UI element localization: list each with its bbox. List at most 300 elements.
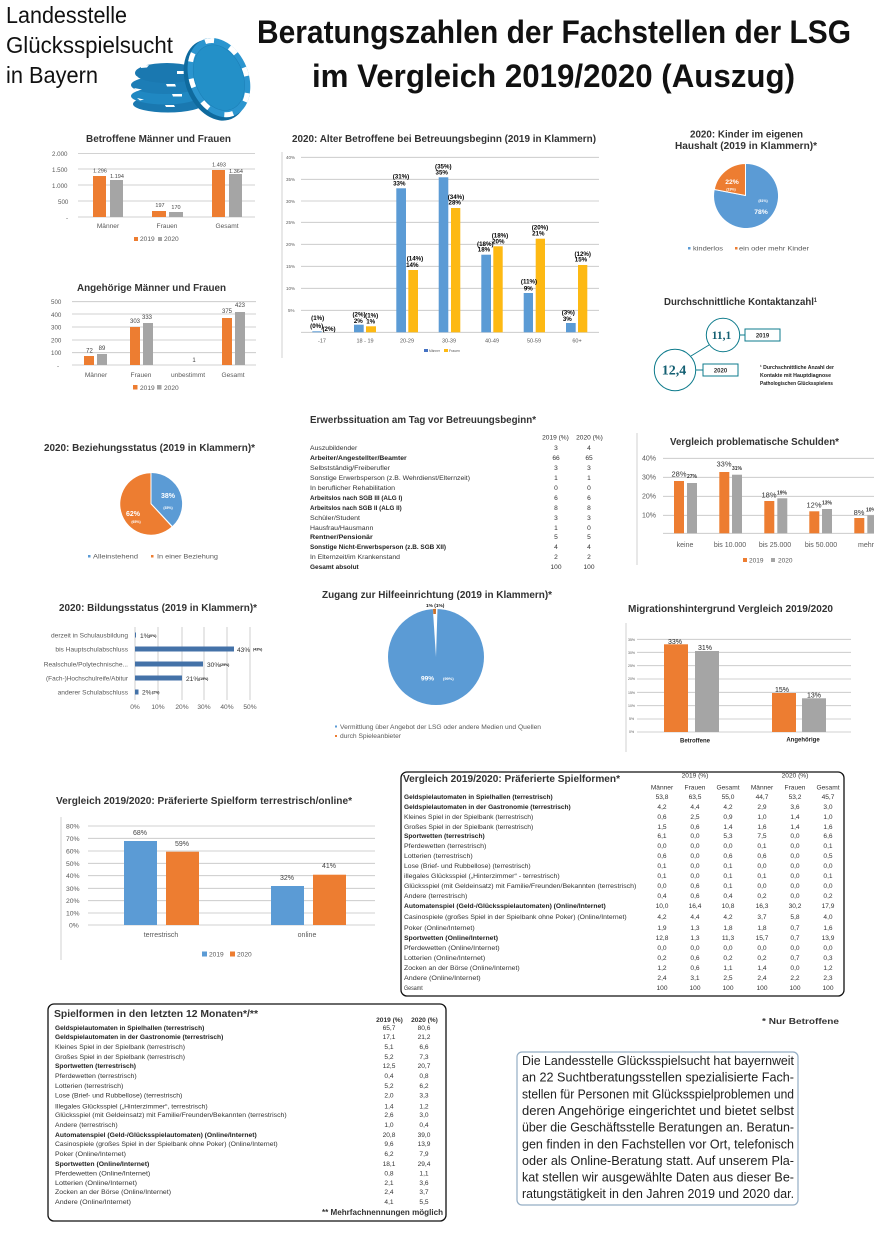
bar chart: Angehörige Männer und Frauen: 100 bbox=[51, 350, 62, 357]
table: Vergleich Präferierte Spielformen: Gesamt bbox=[816, 784, 840, 792]
table: Vergleich Präferierte Spielformen: 0,1 bbox=[823, 843, 833, 850]
table: Spielformen in den letzten 12 Monaten: 1,4 bbox=[384, 1104, 394, 1110]
bar chart: Angehörige Männer und Frauen: 1 bbox=[192, 358, 196, 364]
table: Vergleich Präferierte Spielformen: Sportwetten (terrestrisch) bbox=[404, 833, 485, 840]
bar chart: problematische Schulden: bis 50.000 bbox=[805, 542, 837, 549]
bar chart: Angehörige Männer und Frauen: 300 bbox=[51, 324, 62, 332]
table: Vergleich Präferierte Spielformen: 1,6 bbox=[823, 925, 833, 932]
table: Spielformen in den letzten 12 Monaten: 2,1 bbox=[384, 1180, 394, 1187]
table: Vergleich Präferierte Spielformen: 0,0 bbox=[823, 863, 833, 870]
table: Vergleich Präferierte Spielformen: 0,6 bbox=[690, 955, 700, 962]
legend: 2020 bbox=[164, 236, 179, 243]
pie chart: Beziehungsstatus: (35%) bbox=[163, 506, 173, 510]
table: Vergleich Präferierte Spielformen: 10,0 bbox=[656, 903, 669, 910]
heading: Erwerbssituation am Tag vor Betreuungsbeginn* bbox=[310, 414, 537, 426]
table: Erwerbssituation: 2019 (%) bbox=[542, 434, 569, 442]
table: Erwerbssituation: 3 bbox=[554, 465, 558, 472]
pie chart: Zugang zur Hilfeeinrichtung bbox=[322, 589, 553, 740]
table: Spielformen in den letzten 12 Monaten: Illegales Glücksspiel („Hinterzimmer“, terrestrisch) bbox=[55, 1104, 208, 1110]
logo text: Landesstelle bbox=[6, 2, 127, 28]
table: Erwerbssituation: 5 bbox=[587, 534, 591, 541]
bar chart: problematische Schulden: keine bbox=[677, 542, 693, 549]
bar chart: problematische Schulden: 31% bbox=[732, 466, 743, 472]
table: Erwerbssituation: In beruflicher Rehabilitation bbox=[310, 485, 395, 492]
bar chart: Bildungsstatus: 20% bbox=[175, 704, 189, 711]
diagram: Durchschnittliche Kontaktanzahl: 2020 bbox=[714, 368, 728, 374]
table: Erwerbssituation: 1 bbox=[554, 525, 558, 532]
table: Erwerbssituation: 3 bbox=[587, 465, 591, 472]
bar chart: Präferierte Spielform terrestrisch/online: 70% bbox=[66, 836, 80, 843]
table: Vergleich Präferierte Spielformen: 0,0 bbox=[790, 843, 800, 850]
table: Vergleich Präferierte Spielformen: 0,0 bbox=[790, 945, 800, 952]
bar chart: Angehörige Männer und Frauen: 400 bbox=[51, 312, 62, 319]
table: Spielformen in den letzten 12 Monaten: Pferdewetten (terrestrisch) bbox=[55, 1073, 137, 1080]
title bbox=[257, 14, 851, 94]
table: Vergleich Präferierte Spielformen: Glücksspiel (mit Geldeinsatz) mit Familie/Freunden/Bekannten (terrestrisch) bbox=[404, 883, 636, 890]
table: Erwerbssituation: Sonstige Erwerbsperson (z.B. Wehrdienst/Elternzeit) bbox=[310, 475, 470, 482]
text box: Die Landesstelle: oder als Online-Beratung statt. Auf unserem Pla- bbox=[522, 1153, 794, 1168]
table: Erwerbssituation: 2020 (%) bbox=[576, 434, 603, 442]
table: Vergleich Präferierte Spielformen: 0,0 bbox=[690, 863, 700, 870]
table: Spielformen in den letzten 12 Monaten: 1,1 bbox=[419, 1170, 429, 1178]
heading: Betroffene Männer und Frauen bbox=[86, 133, 231, 145]
table: Spielformen in den letzten 12 Monaten: Zocken an der Börse (Online/Internet) bbox=[55, 1189, 171, 1196]
table: Vergleich Präferierte Spielformen: 1,4 bbox=[790, 814, 800, 821]
bar chart: Präferierte Spielform terrestrisch/online bbox=[56, 795, 375, 960]
table: Vergleich Präferierte Spielformen: 0,4 bbox=[723, 893, 733, 900]
note: Nur Betroffene: * Nur Betroffene bbox=[762, 1016, 839, 1026]
table: Vergleich Präferierte Spielformen: 3,0 bbox=[823, 804, 833, 811]
table: Erwerbssituation: 8 bbox=[554, 505, 558, 512]
bar chart: Alter Betroffene: 20% bbox=[286, 242, 295, 247]
text box: Die Landesstelle: an 22 Suchtberatungsstellen spezialisierte Fach- bbox=[522, 1070, 794, 1085]
table: Vergleich Präferierte Spielformen: Lotterien (Online/Internet) bbox=[404, 955, 485, 962]
table: Vergleich Präferierte Spielformen: 1,6 bbox=[757, 824, 767, 831]
bar chart: Betroffene Männer und Frauen: 1.493 bbox=[212, 162, 226, 168]
footnote: ** Mehrfachnennungen möglich bbox=[322, 1208, 443, 1217]
table: Vergleich Präferierte Spielformen: Andere (Online/Internet) bbox=[404, 975, 481, 982]
diagram: Durchschnittliche Kontaktanzahl: 11,1 bbox=[712, 330, 731, 342]
table: Vergleich Präferierte Spielformen: 0,6 bbox=[657, 853, 667, 860]
bar chart: Betroffene Männer und Frauen: 170 bbox=[171, 205, 181, 211]
bar chart: problematische Schulden: 12% bbox=[806, 500, 822, 510]
table: Spielformen in den letzten 12 Monaten: 4,1 bbox=[384, 1199, 394, 1206]
bar chart: Angehörige Männer und Frauen: Gesamt bbox=[221, 372, 245, 379]
table: Vergleich Präferierte Spielformen: Geldspielautomaten in Spielhallen (terrestrisch) bbox=[404, 794, 553, 801]
table: Vergleich Präferierte Spielformen: Kleines Spiel in der Spielbank (terrestrisch) bbox=[404, 814, 533, 821]
table: Erwerbssituation: Hausfrau/Hausmann bbox=[310, 525, 374, 532]
table: Vergleich Präferierte Spielformen: 0,0 bbox=[657, 945, 667, 952]
bar chart: Bildungsstatus: 21% bbox=[186, 676, 199, 683]
legend: kinderlos bbox=[693, 246, 724, 252]
table: Spielformen in den letzten 12 Monaten: 3,6 bbox=[419, 1180, 429, 1187]
table: Vergleich Präferierte Spielformen: 1,0 bbox=[757, 814, 767, 821]
bar chart: Bildungsstatus: (29%) bbox=[220, 663, 229, 667]
bar chart: Alter Betroffene: 35% bbox=[286, 177, 295, 182]
bar chart: Bildungsstatus: (19%) bbox=[199, 677, 208, 681]
table: Vergleich Präferierte Spielformen: 0,0 bbox=[790, 893, 800, 900]
table: Vergleich Präferierte Spielformen: 6,6 bbox=[823, 833, 833, 840]
diagram: Durchschnittliche Kontaktanzahl: 2019 bbox=[756, 334, 770, 340]
table: Spielformen in den letzten 12 Monaten: 2,4 bbox=[384, 1189, 394, 1196]
table: Spielformen in den letzten 12 Monaten: 18,1 bbox=[383, 1161, 396, 1168]
diagram: Durchschnittliche Kontaktanzahl bbox=[654, 296, 835, 391]
bar chart: Alter Betroffene: 5% bbox=[288, 308, 295, 313]
legend: 2020 bbox=[778, 558, 793, 564]
bar chart: Alter Betroffene: 20% bbox=[492, 239, 505, 246]
bar chart: Migrationshintergrund: 13% bbox=[807, 692, 821, 700]
footnote: ¹ Durchschnittliche Anzahl der bbox=[760, 364, 835, 371]
legend bbox=[133, 385, 179, 392]
table: Vergleich Präferierte Spielformen: 0,4 bbox=[657, 893, 667, 900]
table: Spielformen in den letzten 12 Monaten: Glücksspiel (mit Geldeinsatz) mit Familie/Freunden/Bekannten (terrestrisch) bbox=[55, 1112, 287, 1119]
table: Erwerbssituation: Auszubildender bbox=[310, 445, 358, 452]
logo text: Glücksspielsucht bbox=[6, 32, 174, 58]
bar chart: Bildungsstatus: 10% bbox=[151, 704, 165, 711]
pie chart: Beziehungsstatus: (65%) bbox=[131, 520, 141, 524]
bar chart: Betroffene Männer und Frauen: Frauen bbox=[157, 223, 178, 230]
bar chart: problematische Schulden: bis 10.000 bbox=[714, 542, 746, 549]
table: Vergleich Präferierte Spielformen: 1,3 bbox=[690, 935, 700, 942]
heading: Vergleich 2019/2020: Präferierte Spielformen* bbox=[403, 773, 621, 785]
bar chart: problematische Schulden bbox=[637, 433, 874, 565]
table: Spielformen in den letzten 12 Monaten: 6,6 bbox=[419, 1044, 429, 1051]
table: Vergleich Präferierte Spielformen: 2,4 bbox=[757, 975, 767, 982]
heading: 2020: Bildungsstatus (2019 in Klammern)* bbox=[59, 602, 258, 614]
table: Vergleich Präferierte Spielformen: 2,5 bbox=[690, 814, 700, 821]
bar chart: Alter Betroffene: 10% bbox=[286, 286, 295, 291]
bar chart: Migrationshintergrund: 5% bbox=[629, 717, 634, 721]
bar chart: Präferierte Spielform terrestrisch/online: 41% bbox=[322, 863, 336, 870]
table: Vergleich Präferierte Spielformen: 63,5 bbox=[689, 794, 702, 801]
table: Spielformen in den letzten 12 Monaten: 9,6 bbox=[384, 1141, 394, 1148]
bar chart: Alter Betroffene: (1%) bbox=[311, 315, 324, 322]
bar chart: Bildungsstatus: Realschule/Polytechnische... bbox=[44, 662, 128, 668]
table: Erwerbssituation: 3 bbox=[554, 445, 558, 452]
table: Vergleich Präferierte Spielformen: 0,1 bbox=[723, 883, 733, 890]
table: Spielformen in den letzten 12 Monaten: 6,2 bbox=[384, 1151, 394, 1158]
bar chart: problematische Schulden: 18% bbox=[761, 490, 777, 500]
table: Spielformen in den letzten 12 Monaten: 3,0 bbox=[419, 1112, 429, 1119]
table: Vergleich Präferierte Spielformen: 1,3 bbox=[690, 925, 700, 932]
table: Vergleich Präferierte Spielformen: 100 bbox=[689, 985, 701, 992]
table: Spielformen in den letzten 12 Monaten: 20,7 bbox=[418, 1063, 431, 1070]
bar chart: Alter Betroffene: 15% bbox=[286, 264, 295, 269]
bar chart: Alter Betroffene: 33% bbox=[393, 180, 406, 187]
logo text: in Bayern bbox=[6, 62, 98, 88]
table: Vergleich Präferierte Spielformen: 4,0 bbox=[823, 914, 833, 921]
table: Spielformen in den letzten 12 Monaten: 29,4 bbox=[418, 1161, 431, 1168]
table: Vergleich Präferierte Spielformen: 0,1 bbox=[757, 873, 767, 880]
table: Vergleich Präferierte Spielformen: 12,8 bbox=[656, 935, 669, 942]
logo text bbox=[6, 2, 174, 88]
bar chart: Alter Betroffene: (11%) bbox=[521, 279, 537, 286]
table: Vergleich Präferierte Spielformen: 2019 (%) bbox=[682, 772, 708, 780]
table: Vergleich Präferierte Spielformen: 1,2 bbox=[657, 965, 667, 972]
table: Vergleich Präferierte Spielformen: 0,6 bbox=[690, 965, 700, 972]
table: Vergleich Präferierte Spielformen bbox=[401, 772, 844, 996]
table: Spielformen in den letzten 12 Monaten: Automatenspiel (Geld-/Glücksspielautomaten) (Online/Internet) bbox=[55, 1132, 257, 1139]
bar chart: Migrationshintergrund: Betroffene bbox=[680, 738, 711, 744]
table: Vergleich Präferierte Spielformen: 2,5 bbox=[723, 975, 733, 982]
table: Vergleich Präferierte Spielformen: 10,8 bbox=[722, 903, 735, 910]
footnote: Kontakte mit Hauptdiagnose bbox=[760, 373, 831, 379]
bar chart: Bildungsstatus: 2% bbox=[142, 690, 152, 696]
table: Vergleich Präferierte Spielformen: 44,7 bbox=[756, 794, 769, 801]
legend: In einer Beziehung bbox=[157, 554, 218, 560]
table: Spielformen in den letzten 12 Monaten: 7,3 bbox=[419, 1054, 429, 1061]
table: Vergleich Präferierte Spielformen: 0,1 bbox=[657, 873, 667, 880]
table: Spielformen in den letzten 12 Monaten: 39,0 bbox=[418, 1132, 431, 1139]
bar chart: Bildungsstatus: 0% bbox=[130, 704, 140, 711]
legend: Vermittlung über Angebot der LSG oder andere Medien und Quellen bbox=[340, 724, 541, 731]
table: Erwerbssituation: Gesamt absolut bbox=[310, 564, 359, 571]
table: Erwerbssituation: 4 bbox=[554, 544, 558, 551]
bar chart: problematische Schulden: 19% bbox=[777, 490, 788, 496]
bar chart: Alter Betroffene: 2% bbox=[354, 318, 363, 325]
table: Erwerbssituation: 2 bbox=[554, 554, 558, 561]
table: Vergleich Präferierte Spielformen: 1,5 bbox=[657, 824, 667, 831]
table: Vergleich Präferierte Spielformen: 0,2 bbox=[657, 955, 667, 962]
table: Vergleich Präferierte Spielformen: 100 bbox=[722, 985, 734, 992]
bar chart: Alter Betroffene: 9% bbox=[524, 285, 533, 292]
bar chart: Angehörige Männer und Frauen: unbestimmt bbox=[171, 372, 205, 379]
bar chart: Alter Betroffene: (1%) bbox=[365, 313, 378, 320]
table: Vergleich Präferierte Spielformen: 55,0 bbox=[722, 794, 735, 801]
table: Erwerbssituation: Sonstige Nicht-Erwerbsperson (z.B. SGB XII) bbox=[310, 544, 446, 551]
table: Vergleich Präferierte Spielformen: Männer bbox=[751, 784, 774, 792]
heading bbox=[675, 128, 818, 152]
bar chart: Alter Betroffene: 50-59 bbox=[527, 338, 541, 344]
table: Erwerbssituation: Arbeitslos nach SGB III (ALG I) bbox=[310, 495, 402, 502]
table: Vergleich Präferierte Spielformen: 1,1 bbox=[723, 965, 733, 972]
bar chart: Angehörige Männer und Frauen bbox=[51, 282, 256, 392]
table: Spielformen in den letzten 12 Monaten: Andere (terrestrisch) bbox=[55, 1122, 118, 1129]
table: Erwerbssituation: 65 bbox=[585, 455, 593, 462]
table: Vergleich Präferierte Spielformen: 3,1 bbox=[690, 975, 700, 982]
table: Vergleich Präferierte Spielformen: 1,9 bbox=[657, 925, 667, 932]
bar chart: Betroffene Männer und Frauen: - bbox=[66, 215, 68, 222]
table: Spielformen in den letzten 12 Monaten: 5,1 bbox=[384, 1044, 394, 1051]
bar chart: Alter Betroffene: 30-39 bbox=[442, 338, 456, 344]
bar chart: Präferierte Spielform terrestrisch/online: 40% bbox=[66, 873, 80, 880]
footnote bbox=[760, 364, 835, 387]
bar chart: Präferierte Spielform terrestrisch/online: 80% bbox=[66, 824, 80, 830]
bar chart: Angehörige Männer und Frauen: 423 bbox=[235, 303, 246, 309]
pie chart: Beziehungsstatus: 38% bbox=[161, 493, 176, 500]
bar chart: Alter Betroffene: 21% bbox=[532, 231, 545, 238]
table: Vergleich Präferierte Spielformen: 0,7 bbox=[790, 935, 800, 942]
table: Vergleich Präferierte Spielformen: 5,3 bbox=[723, 833, 733, 840]
table: Vergleich Präferierte Spielformen: Zocken an der Börse (Online/Internet) bbox=[404, 965, 520, 972]
bar chart: Betroffene Männer und Frauen: 197 bbox=[155, 203, 165, 209]
table: Vergleich Präferierte Spielformen: 4,4 bbox=[690, 804, 700, 811]
table: Erwerbssituation: 1 bbox=[554, 475, 558, 482]
table: Vergleich Präferierte Spielformen: 100 bbox=[822, 985, 834, 992]
table: Spielformen in den letzten 12 Monaten: 3,7 bbox=[419, 1189, 429, 1196]
table: Vergleich Präferierte Spielformen: 0,0 bbox=[823, 883, 833, 890]
bar chart: Betroffene Männer und Frauen: 500 bbox=[58, 199, 69, 206]
table: Spielformen in den letzten 12 Monaten bbox=[48, 1004, 446, 1221]
table: Spielformen in den letzten 12 Monaten: 2,6 bbox=[384, 1112, 394, 1119]
table: Vergleich Präferierte Spielformen: 3,6 bbox=[790, 804, 800, 811]
text box: Die Landesstelle: gen finden in den Fachstellen vor Ort, telefonisch bbox=[522, 1136, 794, 1151]
bar chart: Migrationshintergrund: 33% bbox=[668, 639, 682, 646]
table: Vergleich Präferierte Spielformen: illegales Glücksspiel („Hinterzimmer“ - terrestrisch) bbox=[404, 873, 560, 880]
heading: Zugang zur Hilfeeinrichtung (2019 in Klammern)* bbox=[322, 589, 553, 601]
table: Spielformen in den letzten 12 Monaten: 0,8 bbox=[384, 1170, 394, 1178]
bar chart: Alter Betroffene: 35% bbox=[436, 170, 448, 177]
bar chart: Bildungsstatus: (43%) bbox=[253, 648, 262, 652]
table: Vergleich Präferierte Spielformen: 53,2 bbox=[789, 794, 802, 801]
bar chart: Angehörige Männer und Frauen: Männer bbox=[85, 372, 108, 379]
table: Erwerbssituation: 100 bbox=[550, 564, 562, 571]
table: Vergleich Präferierte Spielformen: Gesamt bbox=[716, 784, 740, 792]
heading: Migrationshintergrund Vergleich 2019/2020 bbox=[628, 603, 833, 615]
table: Vergleich Präferierte Spielformen: 0,1 bbox=[823, 873, 833, 880]
bar chart: Präferierte Spielform terrestrisch/online: 59% bbox=[175, 841, 189, 848]
table: Vergleich Präferierte Spielformen: 2,3 bbox=[823, 975, 833, 982]
bar chart: Präferierte Spielform terrestrisch/online: 32% bbox=[280, 875, 294, 882]
table: Spielformen in den letzten 12 Monaten: 65,7 bbox=[383, 1025, 396, 1032]
bar chart: Bildungsstatus: 43% bbox=[237, 647, 250, 654]
bar chart: problematische Schulden: 27% bbox=[687, 474, 698, 480]
table: Vergleich Präferierte Spielformen: 0,9 bbox=[723, 814, 733, 821]
bar chart: Präferierte Spielform terrestrisch/online: 60% bbox=[66, 848, 80, 856]
bar chart: Angehörige Männer und Frauen: 500 bbox=[51, 299, 62, 306]
bar chart: Migrationshintergrund: Angehörige bbox=[786, 738, 820, 744]
table: Vergleich Präferierte Spielformen: 0,0 bbox=[723, 843, 733, 850]
table: Vergleich Präferierte Spielformen: 1,4 bbox=[723, 824, 733, 831]
table: Vergleich Präferierte Spielformen: 0,7 bbox=[790, 955, 800, 962]
table: Spielformen in den letzten 12 Monaten: Sportwetten (terrestrisch) bbox=[55, 1063, 136, 1070]
bar chart: Alter Betroffene: (12%) bbox=[574, 251, 591, 258]
table: Vergleich Präferierte Spielformen: Pferdewetten (terrestrisch) bbox=[404, 843, 486, 850]
table: Vergleich Präferierte Spielformen: 1,8 bbox=[723, 925, 733, 932]
table: Spielformen in den letzten 12 Monaten: Casinospiele (großes Spiel in der Spielbank ohne Poker) (Online/Internet) bbox=[55, 1141, 278, 1148]
bar chart: Bildungsstatus: (2%) bbox=[152, 690, 159, 694]
table: Vergleich Präferierte Spielformen: Lose (Brief- und Rubbellose) (terrestrisch) bbox=[404, 863, 531, 870]
table: Vergleich Präferierte Spielformen: 0,0 bbox=[790, 863, 800, 870]
legend: 2020 bbox=[237, 952, 252, 958]
text box: Die Landesstelle: stellen für Personen mit Glücksspielproblemen und bbox=[522, 1086, 794, 1101]
table: Vergleich Präferierte Spielformen: 4,2 bbox=[723, 804, 733, 811]
legend bbox=[88, 554, 218, 560]
heading: 1 bbox=[814, 298, 818, 304]
table: Spielformen in den letzten 12 Monaten: 0,8 bbox=[419, 1073, 429, 1080]
legend bbox=[202, 952, 252, 958]
table: Erwerbssituation: 8 bbox=[587, 505, 591, 512]
table: Spielformen in den letzten 12 Monaten: 2,0 bbox=[384, 1092, 394, 1100]
table: Vergleich Präferierte Spielformen: 0,1 bbox=[657, 863, 667, 870]
bar chart: Betroffene Männer und Frauen: Männer bbox=[97, 223, 120, 230]
pie chart: Beziehungsstatus bbox=[44, 442, 256, 560]
bar chart: Bildungsstatus: 30% bbox=[197, 704, 211, 711]
table: Vergleich Präferierte Spielformen: 0,0 bbox=[690, 833, 700, 840]
bar chart: Bildungsstatus: 1% bbox=[140, 633, 150, 640]
bar chart: problematische Schulden: 40% bbox=[642, 456, 656, 462]
table: Spielformen in den letzten 12 Monaten: 2019 (%) bbox=[376, 1017, 403, 1024]
table: Vergleich Präferierte Spielformen: Gesamt bbox=[404, 985, 423, 992]
table: Erwerbssituation: In Elternzeit/im Krankenstand bbox=[310, 554, 400, 561]
legend: 2020 bbox=[164, 385, 179, 392]
table: Erwerbssituation: 5 bbox=[554, 534, 558, 541]
table: Erwerbssituation: Arbeiter/Angestellter/Beamter bbox=[310, 455, 407, 462]
bar chart: Betroffene Männer und Frauen: Gesamt bbox=[215, 223, 239, 230]
table: Spielformen in den letzten 12 Monaten: Lotterien (terrestrisch) bbox=[55, 1083, 123, 1090]
heading: 2020: Kinder im eigenen bbox=[690, 128, 803, 140]
bar chart: problematische Schulden: 20% bbox=[642, 494, 656, 500]
bar chart: Präferierte Spielform terrestrisch/online: online bbox=[298, 932, 316, 939]
legend: 2019 bbox=[749, 558, 764, 564]
table: Vergleich Präferierte Spielformen: 0,0 bbox=[790, 965, 800, 972]
bar chart: Betroffene Männer und Frauen: 1.000 bbox=[52, 183, 68, 190]
bar chart: Migrationshintergrund: 25% bbox=[628, 664, 635, 668]
bar chart: Angehörige Männer und Frauen: 89 bbox=[99, 346, 106, 352]
table: Erwerbssituation: 3 bbox=[554, 515, 558, 522]
bar chart: problematische Schulden: 13% bbox=[822, 500, 833, 506]
table: Vergleich Präferierte Spielformen: 16,4 bbox=[689, 903, 702, 910]
table: Vergleich Präferierte Spielformen: 3,7 bbox=[757, 914, 767, 921]
table: Vergleich Präferierte Spielformen: 0,0 bbox=[657, 843, 667, 850]
heading: Angehörige Männer und Frauen bbox=[77, 282, 226, 294]
table: Erwerbssituation: 0 bbox=[554, 485, 558, 492]
table: Vergleich Präferierte Spielformen: 0,1 bbox=[723, 863, 733, 870]
table: Vergleich Präferierte Spielformen: 15,7 bbox=[756, 935, 769, 942]
pie chart: Kinder im Haushalt: (81%) bbox=[758, 199, 768, 203]
table: Vergleich Präferierte Spielformen: 0,6 bbox=[690, 824, 700, 831]
table: Erwerbssituation: 6 bbox=[554, 495, 558, 502]
table: Erwerbssituation: 1 bbox=[587, 475, 591, 482]
text box: Die Landesstelle: Die Landesstelle Glücksspielsucht hat bayernweit bbox=[522, 1053, 794, 1068]
bar chart: Alter Betroffene: 60+ bbox=[572, 338, 582, 344]
bar chart: Präferierte Spielform terrestrisch/online: 50% bbox=[66, 861, 80, 868]
table: Spielformen in den letzten 12 Monaten: Poker (Online/Internet) bbox=[55, 1151, 126, 1158]
footnote: Pathologischen Glücksspielens bbox=[760, 381, 833, 387]
table: Vergleich Präferierte Spielformen: 0,3 bbox=[823, 955, 833, 962]
bar chart: Angehörige Männer und Frauen: 200 bbox=[51, 338, 62, 344]
legend: Frauen bbox=[449, 348, 460, 353]
table: Spielformen in den letzten 12 Monaten: 20,8 bbox=[383, 1132, 396, 1139]
table: Spielformen in den letzten 12 Monaten: Andere (Online/Internet) bbox=[55, 1199, 131, 1206]
table: Vergleich Präferierte Spielformen: Pferdewetten (Online/Internet) bbox=[404, 945, 500, 952]
table: Vergleich Präferierte Spielformen: 2,4 bbox=[657, 975, 667, 982]
table: Vergleich Präferierte Spielformen: Lotterien (terrestrisch) bbox=[404, 853, 473, 860]
bar chart: problematische Schulden: 10% bbox=[642, 512, 656, 520]
bar chart: Alter Betroffene: 14% bbox=[406, 262, 419, 269]
bar chart: Alter Betroffene: (34%) bbox=[448, 194, 464, 201]
table: Vergleich Präferierte Spielformen: 0,6 bbox=[657, 814, 667, 821]
bar chart: Alter Betroffene: 30% bbox=[286, 199, 295, 204]
table: Spielformen in den letzten 12 Monaten: Lose (Brief- und Rubbellose) (terrestrisch) bbox=[55, 1092, 182, 1100]
table: Vergleich Präferierte Spielformen: 0,0 bbox=[657, 883, 667, 890]
table: Vergleich Präferierte Spielformen: 0,0 bbox=[790, 833, 800, 840]
table: Spielformen in den letzten 12 Monaten: 7,9 bbox=[419, 1151, 429, 1158]
table: Vergleich Präferierte Spielformen: 0,6 bbox=[757, 853, 767, 860]
legend: durch Spieleanbieter bbox=[340, 733, 402, 740]
table: Vergleich Präferierte Spielformen: 16,3 bbox=[756, 903, 769, 910]
table: Erwerbssituation: 0 bbox=[587, 485, 591, 492]
bar chart: Alter Betroffene: (20%) bbox=[532, 224, 548, 231]
heading: Spielformen in den letzten 12 Monaten*/** bbox=[54, 1008, 259, 1020]
text box: Die Landesstelle: kat stellen wir ausgewählte Daten aus dieser Be- bbox=[522, 1170, 794, 1185]
table: Vergleich Präferierte Spielformen: 0,2 bbox=[723, 955, 733, 962]
bar chart: Angehörige Männer und Frauen: - bbox=[57, 363, 59, 370]
bar chart: Alter Betroffene: 25% bbox=[286, 220, 295, 225]
table: Spielformen in den letzten 12 Monaten: 21,2 bbox=[418, 1034, 431, 1041]
table: Vergleich Präferierte Spielformen: 0,6 bbox=[723, 853, 733, 860]
bar chart: Alter Betroffene: (2%) bbox=[352, 311, 366, 318]
